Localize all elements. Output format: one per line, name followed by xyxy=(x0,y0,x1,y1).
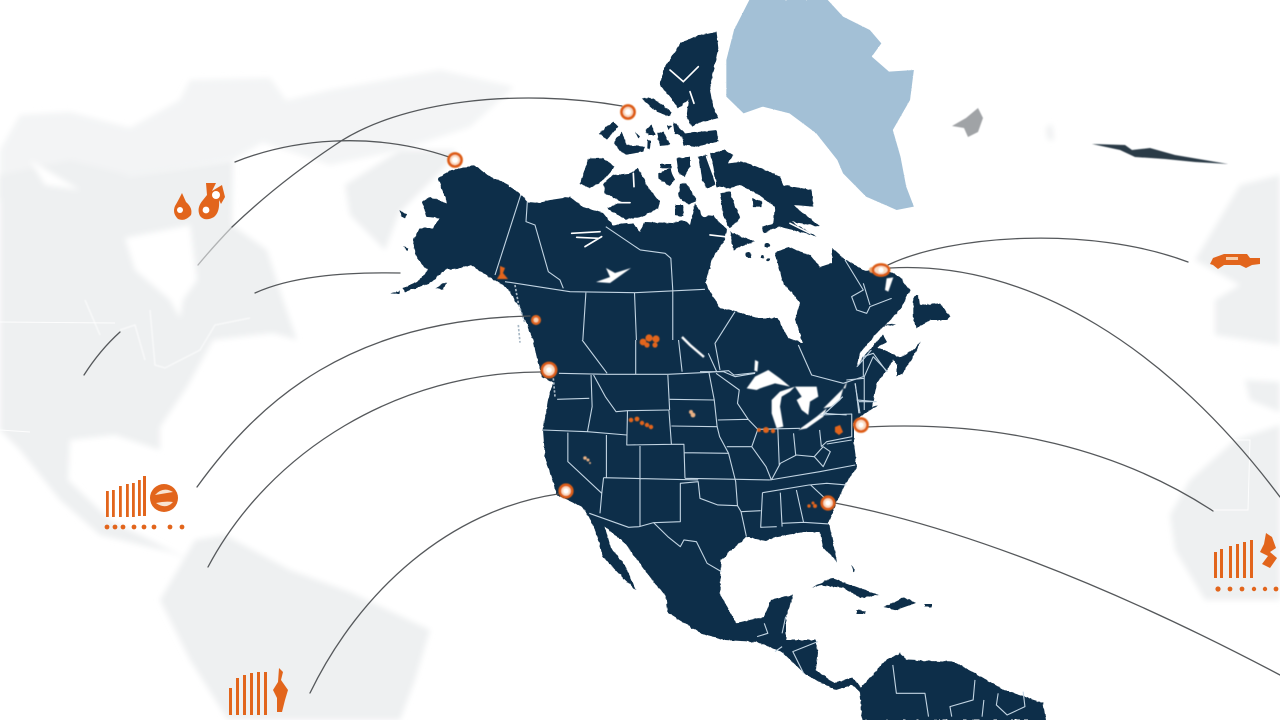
Hudson Bay islands xyxy=(732,240,950,328)
cluster: Georgia xyxy=(807,502,817,508)
cluster: South Dakota xyxy=(689,410,695,417)
marker: Vancouver xyxy=(542,363,556,377)
state and province borders xyxy=(495,195,1025,717)
North America landmass xyxy=(390,32,1046,720)
marker: New York xyxy=(854,418,868,432)
icon: car xyxy=(1210,254,1260,269)
mainland: Alaska, Canada, USA, Mexico, Central America xyxy=(403,165,1046,720)
cluster: Pennsylvania xyxy=(835,425,843,435)
Cuba xyxy=(811,578,879,598)
Great Lakes xyxy=(747,277,893,430)
white fjords in Arctic islands xyxy=(572,67,810,247)
island: Iceland xyxy=(952,108,983,137)
marker: Georgia coast xyxy=(822,497,834,509)
marker: Arctic xyxy=(622,106,634,118)
marker: British Columbia xyxy=(531,315,541,325)
BC coastal islands xyxy=(515,285,555,397)
Arctic islands xyxy=(580,32,820,250)
marker: Alaska xyxy=(448,154,462,166)
Great Bear Lake xyxy=(572,232,602,247)
cluster: Saskatchewan xyxy=(640,334,660,348)
icon: bars and face, Gulf xyxy=(105,476,184,529)
Anticosti xyxy=(882,323,897,326)
icon: bars and figure, Africa xyxy=(1214,533,1278,592)
Puerto Rico xyxy=(925,604,932,607)
cluster: Nevada xyxy=(583,456,591,464)
Bahamas xyxy=(851,565,855,572)
Jamaica xyxy=(857,610,866,614)
cluster: Wyoming xyxy=(629,417,653,429)
Great Slave Lake xyxy=(596,268,631,283)
Newfoundland xyxy=(913,295,950,328)
Greenland xyxy=(726,0,914,210)
Lake Winnipeg xyxy=(682,337,704,357)
icon: bars and figure, South America xyxy=(229,668,288,715)
Alaska outer islands xyxy=(390,210,447,294)
flight arcs xyxy=(84,98,1280,693)
cluster: Illinois xyxy=(757,427,775,433)
location markers xyxy=(448,106,889,509)
marker: Los Angeles xyxy=(560,485,572,497)
island chain: dark strip xyxy=(1092,144,1228,164)
lakes and inland water xyxy=(596,268,893,430)
icon: flames xyxy=(174,183,225,220)
marker: Newfoundland coast xyxy=(869,264,889,276)
inland orange clusters xyxy=(497,266,843,508)
Hispaniola xyxy=(884,597,916,610)
cluster: Yukon xyxy=(497,266,508,279)
